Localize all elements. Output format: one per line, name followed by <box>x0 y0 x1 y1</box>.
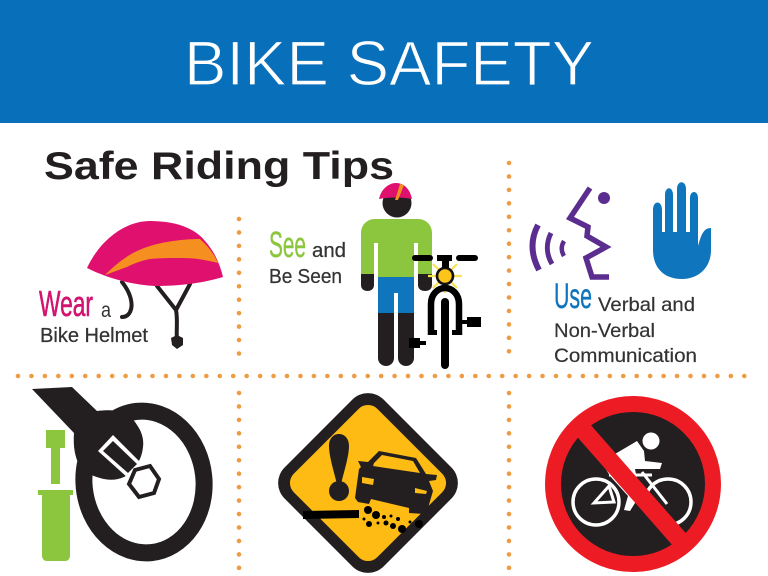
text: use verbal and non-verbal communication: Non-Verbal <box>554 320 655 342</box>
icon: prohibition bar <box>577 423 686 547</box>
title banner <box>0 0 768 123</box>
icon: bicycle with light <box>409 255 481 369</box>
icon: helmet straps <box>122 282 190 349</box>
icon: cyclist standing <box>361 183 432 366</box>
icon: road edge and gravel <box>303 506 423 533</box>
text: wear a bike helmet <box>39 283 148 347</box>
text: use verbal and non-verbal communication <box>554 277 697 367</box>
icon: helmet shell <box>87 221 223 286</box>
icon: screwdriver <box>38 430 73 561</box>
icon: speaking face <box>532 188 610 277</box>
text: use verbal and non-verbal communication: Use <box>554 277 592 316</box>
text: see and be seen <box>269 224 346 288</box>
icon: sign yellow face <box>285 400 451 566</box>
icon: raised hand <box>653 182 711 279</box>
panel: see and be seen <box>269 183 481 369</box>
panel: check your bike <box>32 387 211 561</box>
icon: cyclist <box>573 432 691 525</box>
icon: warning sign <box>269 384 467 576</box>
text: see and be seen: See <box>269 224 306 265</box>
text: wear a bike helmet: a <box>101 299 111 322</box>
icon: exclamation mark <box>329 434 349 501</box>
panel: road hazard <box>269 384 467 576</box>
icon: car <box>355 451 437 514</box>
panel: verbal and non-verbal communication <box>532 182 711 367</box>
text: see and be seen: and <box>312 240 346 262</box>
text: use verbal and non-verbal communication: Communication <box>554 345 697 367</box>
title: BIKE SAFETY <box>184 29 594 99</box>
panel: wear a bike helmet <box>39 221 223 349</box>
text: wear a bike helmet: Wear <box>39 283 93 324</box>
heading: safe riding tips: Safe Riding Tips <box>44 145 394 188</box>
text: see and be seen: Be Seen <box>269 266 342 288</box>
icon: red prohibition circle <box>553 404 713 564</box>
panel: no riding sign <box>553 404 713 564</box>
icon: wheel <box>77 405 211 559</box>
icon: wrench <box>32 387 159 497</box>
text: wear a bike helmet: Bike Helmet <box>40 325 148 347</box>
text: use verbal and non-verbal communication: Verbal and <box>598 294 695 316</box>
